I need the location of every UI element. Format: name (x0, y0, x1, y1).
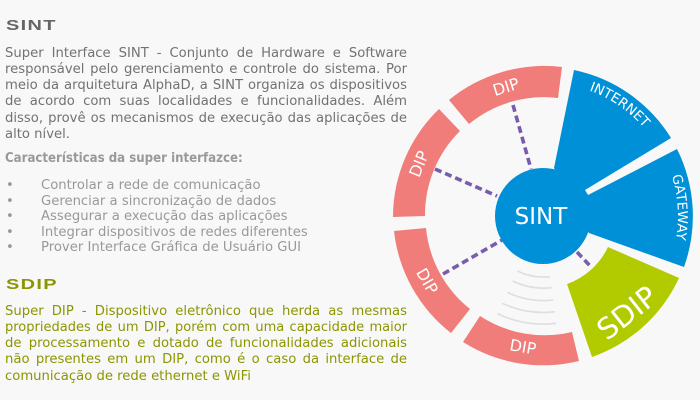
connector: dashed links (435, 105, 592, 274)
segment: DIP bottom (463, 316, 579, 365)
bullet list: características: • (6, 194, 14, 209)
segment: INTERNET and GATEWAY hub: SINT (515, 204, 568, 230)
bullet list: características: • (6, 209, 14, 224)
bullet list: características: Assegurar a execução das aplicações (41, 209, 288, 224)
bullet list: características: Controlar a rede de comunicação (41, 178, 261, 193)
heading: SINT: SINT (6, 17, 57, 34)
bullet list: características: Gerenciar a sincronização de dados (41, 194, 276, 209)
segment: DIP top: DIP (490, 74, 522, 100)
icon: wireless waves (497, 271, 556, 324)
text block: SDIP description: Super DIP - Dispositivo eletrônico que herda as mesmas (5, 304, 407, 319)
segment: INTERNET and GATEWAY hub (495, 70, 693, 267)
text block: SINT description: responsável pelo gerenciamento e controle do sistema. Por (5, 62, 407, 77)
segment: DIP upper left (393, 109, 460, 217)
bullet list: características: • (6, 225, 14, 240)
heading: SDIP: SDIP (6, 276, 58, 293)
segment: DIP top (449, 66, 562, 124)
text block: SDIP description (5, 304, 407, 384)
subheading: características: Características da super interfazce: (5, 151, 243, 166)
segment: SDIP: SDIP (590, 279, 664, 347)
text block: SINT description: meio da arquitetura AlphaD, a SINT organiza os dispositivos (5, 78, 407, 93)
text block: SDIP description: não presentes em um DIP, como é o caso da interface de (5, 352, 407, 367)
bullet list: características (6, 178, 308, 255)
bullet list: características: Integrar dispositivos de redes diferentes (41, 225, 308, 240)
segment: DIP bottom: DIP (508, 335, 538, 359)
text block: SDIP description: comunicação de rede ethernet e WiFi (5, 369, 251, 384)
segment: INTERNET and GATEWAY hub: INTERNET (590, 82, 652, 126)
text block: SDIP description: de processamento e dotado de funcionalidades adicionais (5, 336, 407, 351)
segment: INTERNET and GATEWAY hub: GATEWAY (672, 174, 688, 241)
text block: SINT description: alto nível. (5, 127, 70, 142)
segment: DIP lower left (394, 228, 470, 333)
bullet list: características: • (6, 178, 14, 193)
bullet list: características: Prover Interface Gráfica de Usuário GUI (41, 240, 301, 255)
text block: SINT description: Super Interface SINT - Conjunto de Hardware e Software (5, 46, 407, 61)
segment: DIP upper left: DIP (405, 148, 433, 180)
text block: SINT description: de acordo com suas localidades e funcionalidades. Além (5, 94, 407, 109)
text block: SINT description: disso, provê os mecanismos de execução das aplicações de (5, 111, 407, 126)
segment: DIP lower left: DIP (412, 265, 442, 298)
segment: SDIP (567, 247, 679, 357)
text block: SINT description (5, 46, 408, 142)
bullet list: características: • (6, 240, 14, 255)
hub: SINT (495, 168, 591, 264)
text block: SDIP description: propriedades de um DIP, porém com uma capacidade maior (5, 320, 407, 335)
